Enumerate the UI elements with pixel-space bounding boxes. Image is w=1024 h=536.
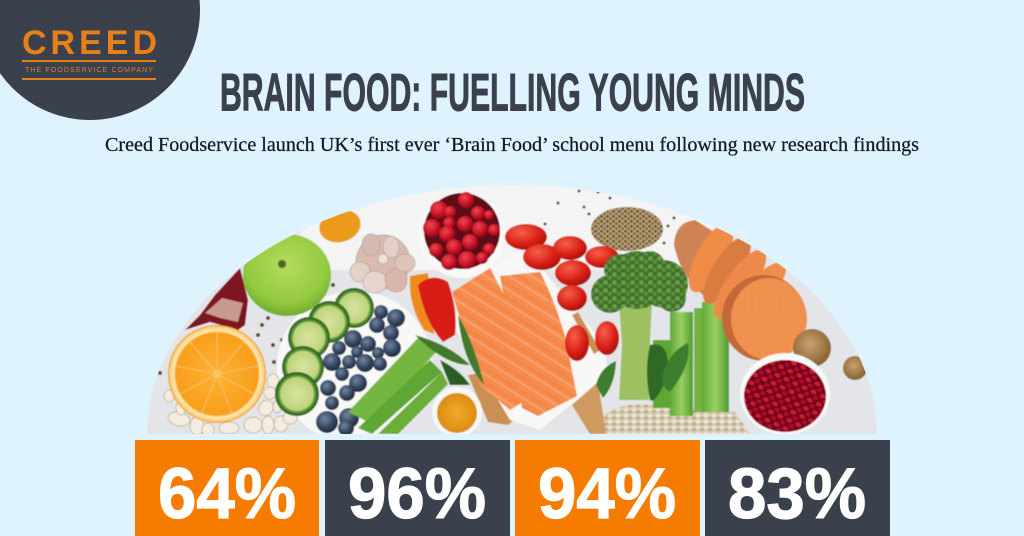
icon: honey bowl: [432, 387, 482, 437]
icon: garlic: [350, 234, 415, 293]
icon: wooden board strip: [572, 312, 600, 354]
pomegranate pith: [205, 298, 243, 322]
stray seeds: [158, 190, 676, 375]
icon: spinach leaves: [596, 343, 689, 401]
logo bottom rule: [22, 78, 156, 80]
icon: herb leaves: [415, 315, 484, 385]
icon: celery bundle: [653, 302, 729, 416]
logo wordmark: CREED: [22, 24, 157, 62]
icon: parchment paper: [455, 270, 606, 430]
icon: orange slice: [168, 325, 266, 423]
icon: turmeric bowl: [311, 202, 367, 254]
icon: salmon fillet back: [500, 272, 577, 416]
icon: cherry bowl: [419, 192, 505, 278]
stat value: 83%: [728, 455, 866, 534]
logo background circle: [0, 0, 200, 120]
logo top rule: [22, 60, 156, 62]
icon: oats: [590, 404, 750, 434]
icon: white plate: [277, 291, 433, 443]
icon: wooden board right: [572, 382, 606, 434]
icon: seed pile: [591, 207, 663, 251]
stat value: 94%: [538, 455, 676, 534]
icon: broccoli: [591, 251, 688, 400]
icon: white beans: [164, 374, 297, 437]
logo tagline: THE FOODSERVICE COMPANY: [25, 67, 153, 74]
stat card: 94%: [515, 440, 700, 536]
pomegranate seeds: [744, 360, 826, 432]
stat value: 96%: [348, 455, 486, 534]
subtitle: Creed Foodservice launch UK’s first ever ‘Brain Food’ school menu following new research findings: [105, 134, 919, 156]
icon: red pepper: [418, 278, 456, 342]
icon: walnuts: [793, 329, 867, 380]
icon: tomatoes: [505, 224, 619, 361]
apple stem hollow: [278, 260, 286, 268]
honey: [437, 393, 477, 433]
icon: pomegranate wedge: [185, 268, 248, 330]
icon: pomegranate bowl: [740, 353, 830, 435]
icon: wooden board: [468, 373, 513, 426]
stat card: 64%: [135, 440, 319, 536]
logo: Creed badge: [0, 0, 200, 120]
icon: salmon fillet front: [451, 268, 522, 410]
icon: apple: [243, 234, 331, 316]
icon: orange pepper: [410, 273, 434, 334]
icon: blueberries: [316, 305, 405, 436]
stat value: 64%: [158, 455, 296, 534]
icon: sweet potato: [674, 217, 807, 361]
turmeric: [318, 210, 362, 243]
icon: celery sticks: [348, 338, 448, 434]
stat card: 83%: [705, 440, 890, 536]
food illustration dome: [140, 180, 885, 443]
stat card: 96%: [325, 440, 510, 536]
icon: cucumber slices: [275, 288, 374, 416]
